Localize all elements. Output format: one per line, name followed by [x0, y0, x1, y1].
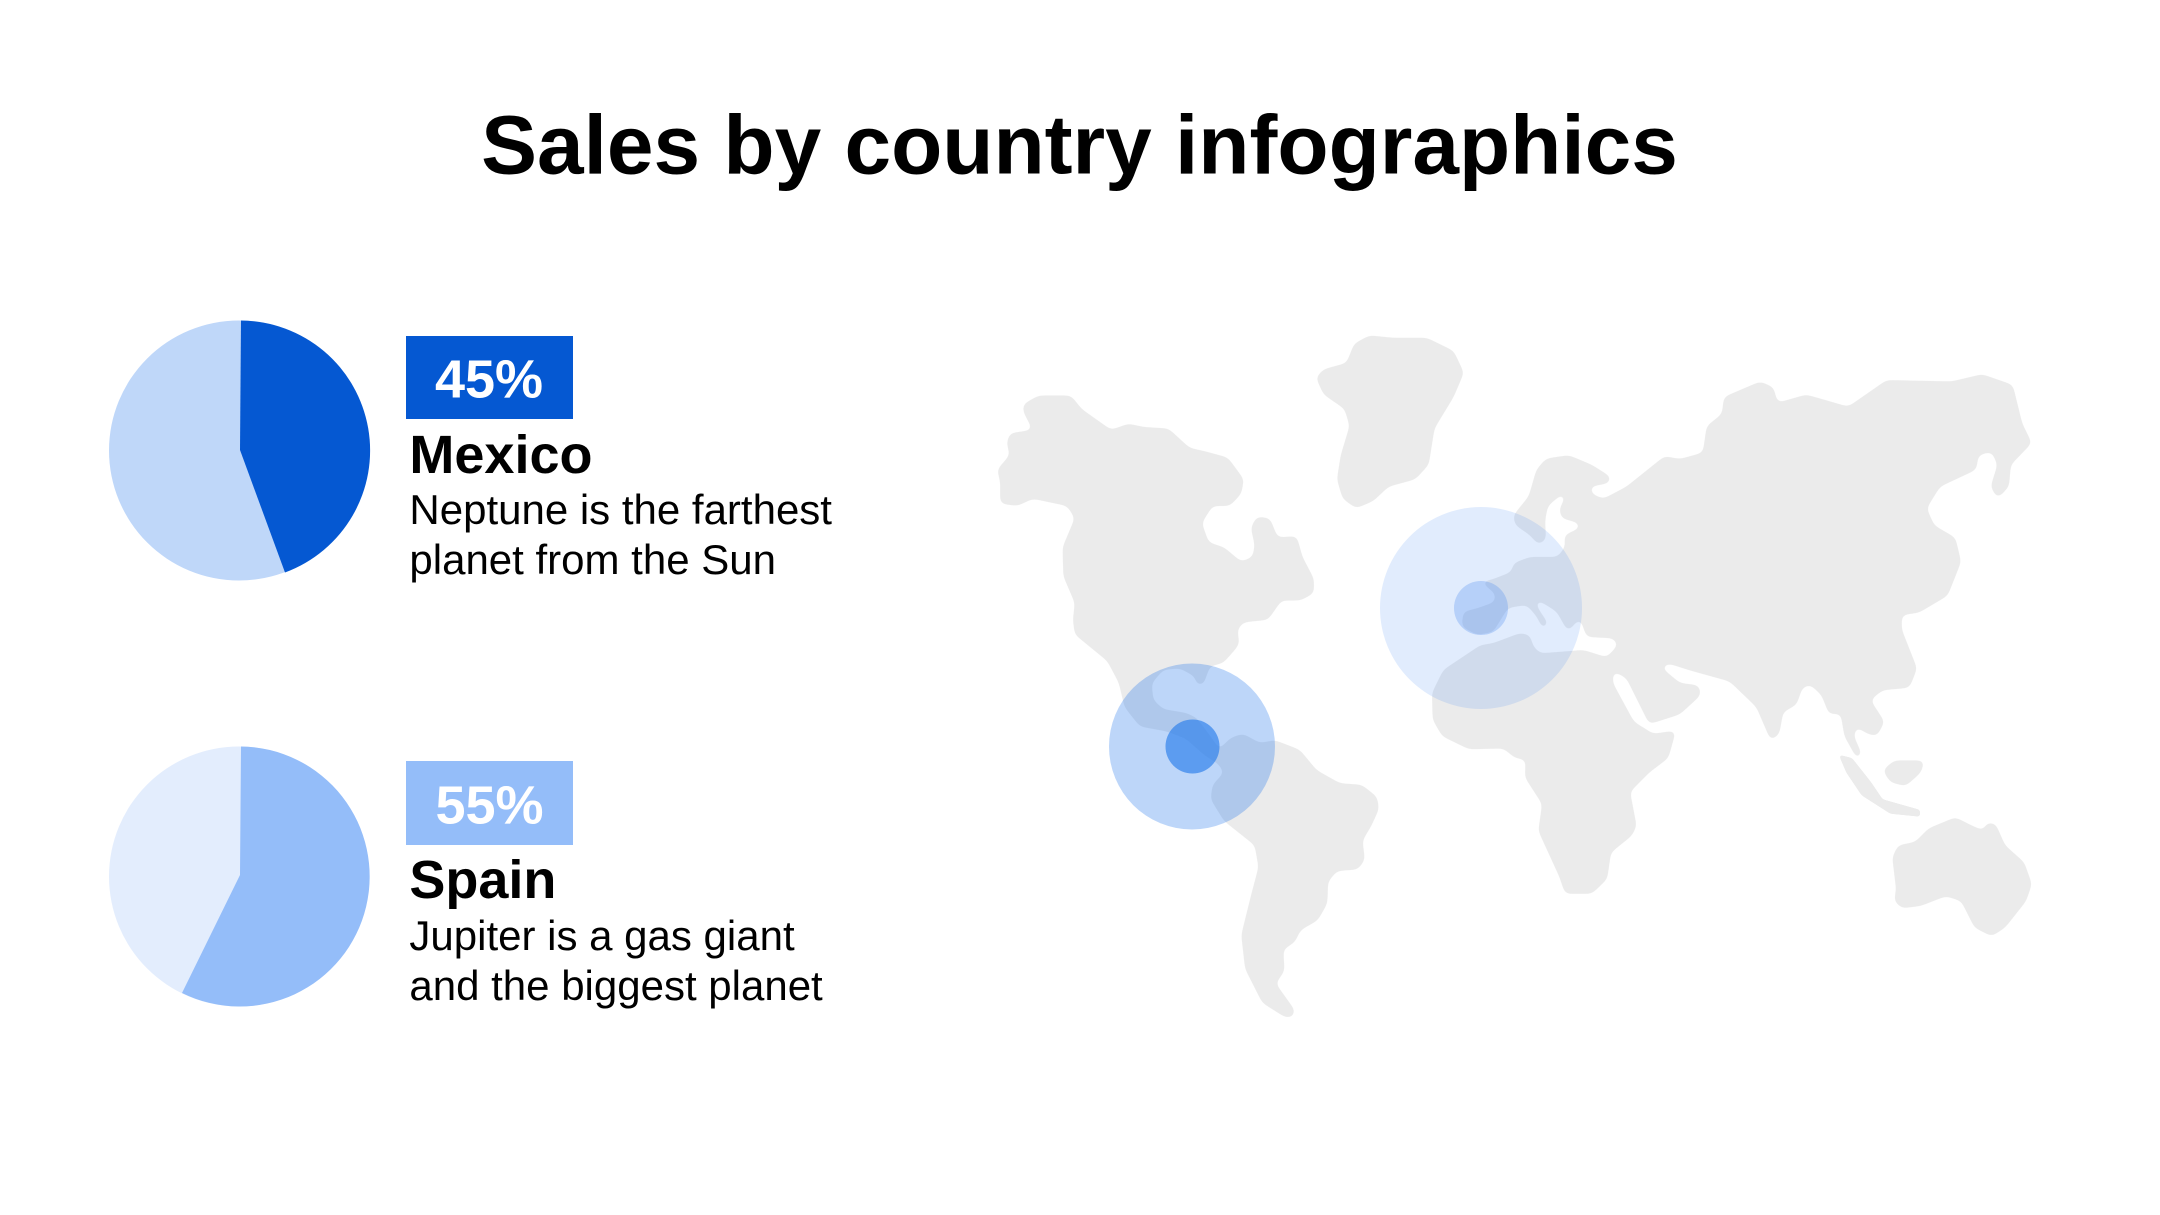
badge: 45% [406, 336, 573, 419]
pie chart: Mexico 45% [109, 320, 370, 580]
text: Mexico description: Neptune is the farthest [409, 486, 832, 533]
heading: Spain: Spain [409, 850, 556, 910]
badge: 55% [406, 761, 573, 845]
panel: Spain [109, 746, 823, 1009]
marker: Spain [1380, 507, 1582, 709]
marker: Mexico [1109, 664, 1275, 830]
world map [997, 335, 2032, 1017]
text: Spain description: Jupiter is a gas giant [409, 912, 795, 959]
heading: Mexico: Mexico [409, 425, 592, 485]
text: Mexico description: planet from the Sun [409, 536, 776, 583]
title: Sales by country infographics [481, 98, 1678, 192]
text: Spain description: and the biggest planet [409, 962, 823, 1009]
panel: Mexico [109, 320, 832, 583]
pie chart: Spain 55% [109, 746, 370, 1006]
badge: 55%: 55% [435, 776, 544, 836]
badge: 45%: 45% [435, 350, 543, 410]
